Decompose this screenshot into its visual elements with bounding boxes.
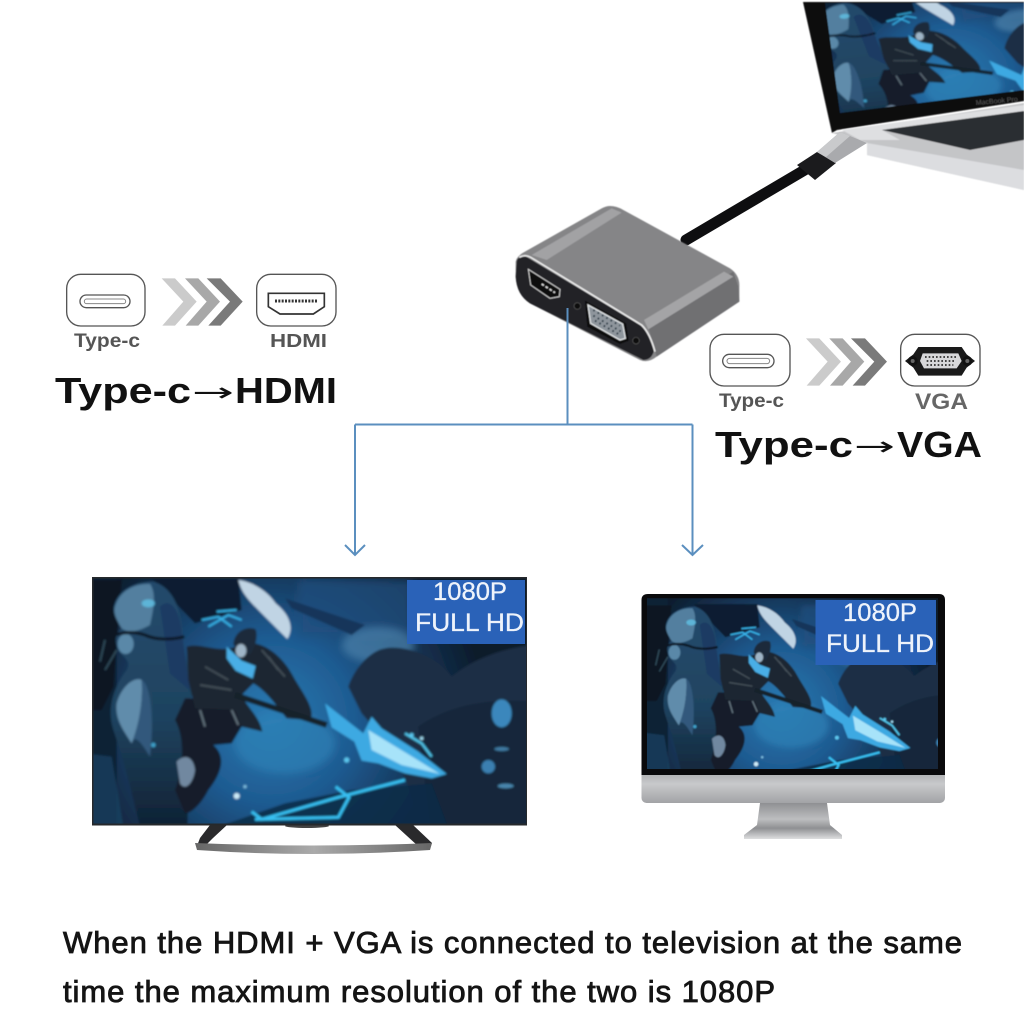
caption [63,925,962,1009]
heading: Type-c to VGA: VGA [897,424,982,465]
vga callout [710,334,982,465]
tv stand [195,824,432,854]
icon: chevrons [162,278,243,326]
vga port [585,301,629,344]
label: HDMI: HDMI [270,331,327,351]
label: VGA: VGA [915,389,968,414]
laptop lid bezel [803,2,1024,133]
hdmi port [528,269,560,298]
icon: hdmi [257,274,336,326]
cable boot [797,152,836,180]
heading: Type-c to HDMI: → [192,378,234,408]
hdmi callout [55,274,337,411]
arrow to tv [345,545,365,555]
icon: vga [901,334,980,386]
heading: Type-c to HDMI: HDMI [235,370,337,411]
tv frame [92,577,527,826]
laptop screen artwork [824,2,1024,114]
tv screen artwork [94,578,526,824]
heading: Type-c to HDMI: Type-c [55,370,191,411]
laptop base [832,103,1024,190]
heading: Type-c to VGA: → [854,432,895,462]
caption line 1: When the HDMI + VGA is connected to television at the same [63,925,962,960]
heading: Type-c to HDMI [55,370,337,411]
laptop keyboard [882,111,1024,150]
badge: FULL HD [415,609,524,637]
monitor [642,594,945,839]
adapter body [516,206,739,361]
badge: 1080P [843,599,917,627]
label: Type-c: Type-c [719,391,784,412]
adapter front face [516,256,654,360]
badge [816,599,936,665]
connection lines [345,308,703,555]
arrow to monitor [682,545,703,555]
monitor screen artwork [647,598,938,769]
icon: type-c [710,334,790,386]
television [85,570,552,854]
usb-c cable and plug [686,132,867,240]
monitor frame [642,594,945,775]
badge [407,578,525,644]
badge: FULL HD [826,630,934,658]
plug [817,132,867,163]
heading: Type-c to VGA: Type-c [715,424,853,465]
laptop brand text: MacBook Pro [976,96,1018,107]
label: Type-c: Type-c [74,331,140,352]
monitor stand [744,803,842,839]
monitor chin [642,765,945,803]
laptop [793,0,1024,190]
icon: chevrons [806,338,887,386]
adapter [516,206,739,361]
badge: 1080P [433,578,507,606]
heading: Type-c to VGA [715,424,982,465]
caption line 2: time the maximum resolution of the two is 1080P [63,974,775,1009]
icon: type-c [67,274,145,326]
